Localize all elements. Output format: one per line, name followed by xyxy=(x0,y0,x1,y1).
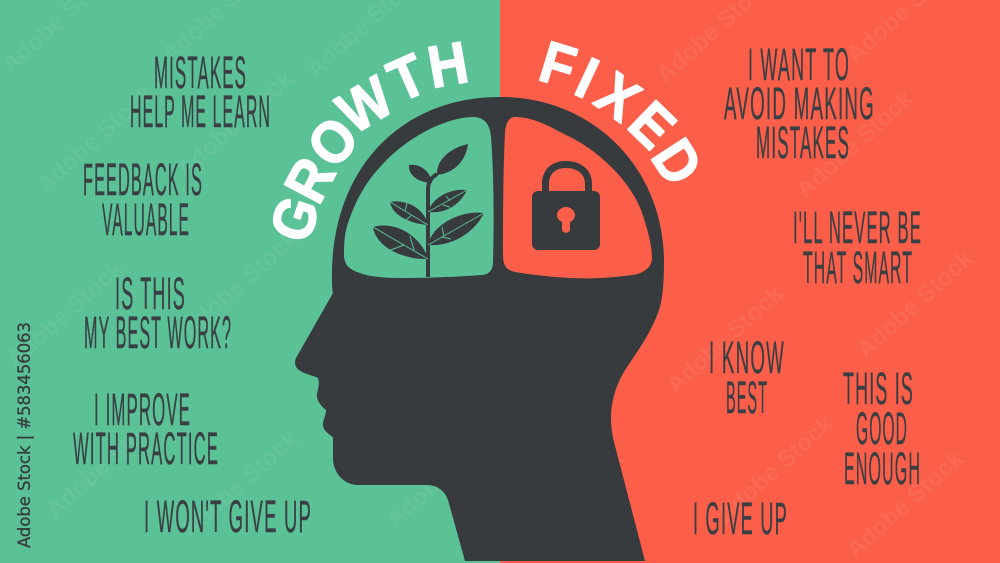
panel: growth background xyxy=(0,0,500,563)
icon: plant xyxy=(373,144,484,277)
text: i'll never be that smart xyxy=(793,202,922,293)
text: this is good enough xyxy=(843,363,921,494)
text: mistakes help me learn xyxy=(130,47,271,137)
heading: growth: W xyxy=(327,64,405,147)
text: is this my best work xyxy=(84,268,232,358)
heading: growth: O xyxy=(295,105,372,180)
icon: padlock xyxy=(532,164,600,250)
text: BEST xyxy=(726,372,768,423)
text: i want to avoid making mistakes: I WANT TO xyxy=(748,39,850,90)
text: FEEDBACK IS xyxy=(83,154,203,205)
text: I GIVE UP xyxy=(693,493,788,544)
watermark pattern: Adobe Stock xyxy=(501,445,629,563)
watermark pattern: Adobe Stock xyxy=(841,445,969,563)
panel: fixed background xyxy=(500,0,1000,563)
panel: fixed brain lobe xyxy=(503,117,652,278)
heading: growth: G xyxy=(258,189,333,249)
heading: growth: R xyxy=(273,148,349,213)
watermark pattern: Adobe Stock xyxy=(381,415,509,534)
watermark pattern: Adobe Stock xyxy=(41,405,169,524)
panel: growth brain lobe xyxy=(344,117,494,278)
text: WITH PRACTICE xyxy=(73,423,219,474)
watermark pattern: Adobe Stock xyxy=(791,85,919,204)
watermark pattern: Adobe Stock xyxy=(531,255,659,374)
watermark pattern: Adobe Stock xyxy=(31,80,159,199)
heading: fixed: I xyxy=(566,46,607,112)
text: feedback is valuable xyxy=(83,154,203,245)
text: i improve with practice xyxy=(73,384,219,474)
watermark pattern: Adobe Stock xyxy=(711,410,839,529)
heading: growth xyxy=(258,30,473,249)
watermark pattern: Adobe Stock xyxy=(661,280,789,399)
watermark pattern: Adobe Stock xyxy=(1,255,129,374)
watermark pattern: Adobe Stock xyxy=(176,425,304,544)
text: I KNOW xyxy=(709,332,785,383)
text: MY BEST WORK? xyxy=(84,307,232,358)
text: I WON'T GIVE UP xyxy=(144,491,312,542)
heading: growth: T xyxy=(379,42,436,115)
text: i want to avoid making mistakes xyxy=(724,39,875,168)
text: VALUABLE xyxy=(102,194,190,245)
watermark pattern: Adobe Stock xyxy=(171,65,299,184)
heading: fixed: X xyxy=(584,60,651,135)
text: is this my best work: IS THIS xyxy=(115,268,186,319)
heading: fixed xyxy=(532,30,715,197)
heading: fixed: F xyxy=(532,30,583,102)
text: HELP ME LEARN xyxy=(130,86,271,137)
text: stock id credit: Adobe Stock | #583456063 xyxy=(15,322,35,548)
heading: growth: H xyxy=(423,30,473,101)
heading: fixed: E xyxy=(616,89,687,162)
text: i know best xyxy=(709,332,785,423)
head silhouette xyxy=(295,97,664,561)
text: MISTAKES xyxy=(154,47,247,98)
text: I IMPROVE xyxy=(94,384,191,435)
watermark pattern: Adobe Stock xyxy=(176,225,304,344)
watermark pattern: Adobe Stock xyxy=(851,245,979,364)
text: MISTAKES xyxy=(756,117,850,168)
heading: fixed: D xyxy=(638,128,715,197)
watermark pattern: Adobe Stock xyxy=(331,270,459,389)
